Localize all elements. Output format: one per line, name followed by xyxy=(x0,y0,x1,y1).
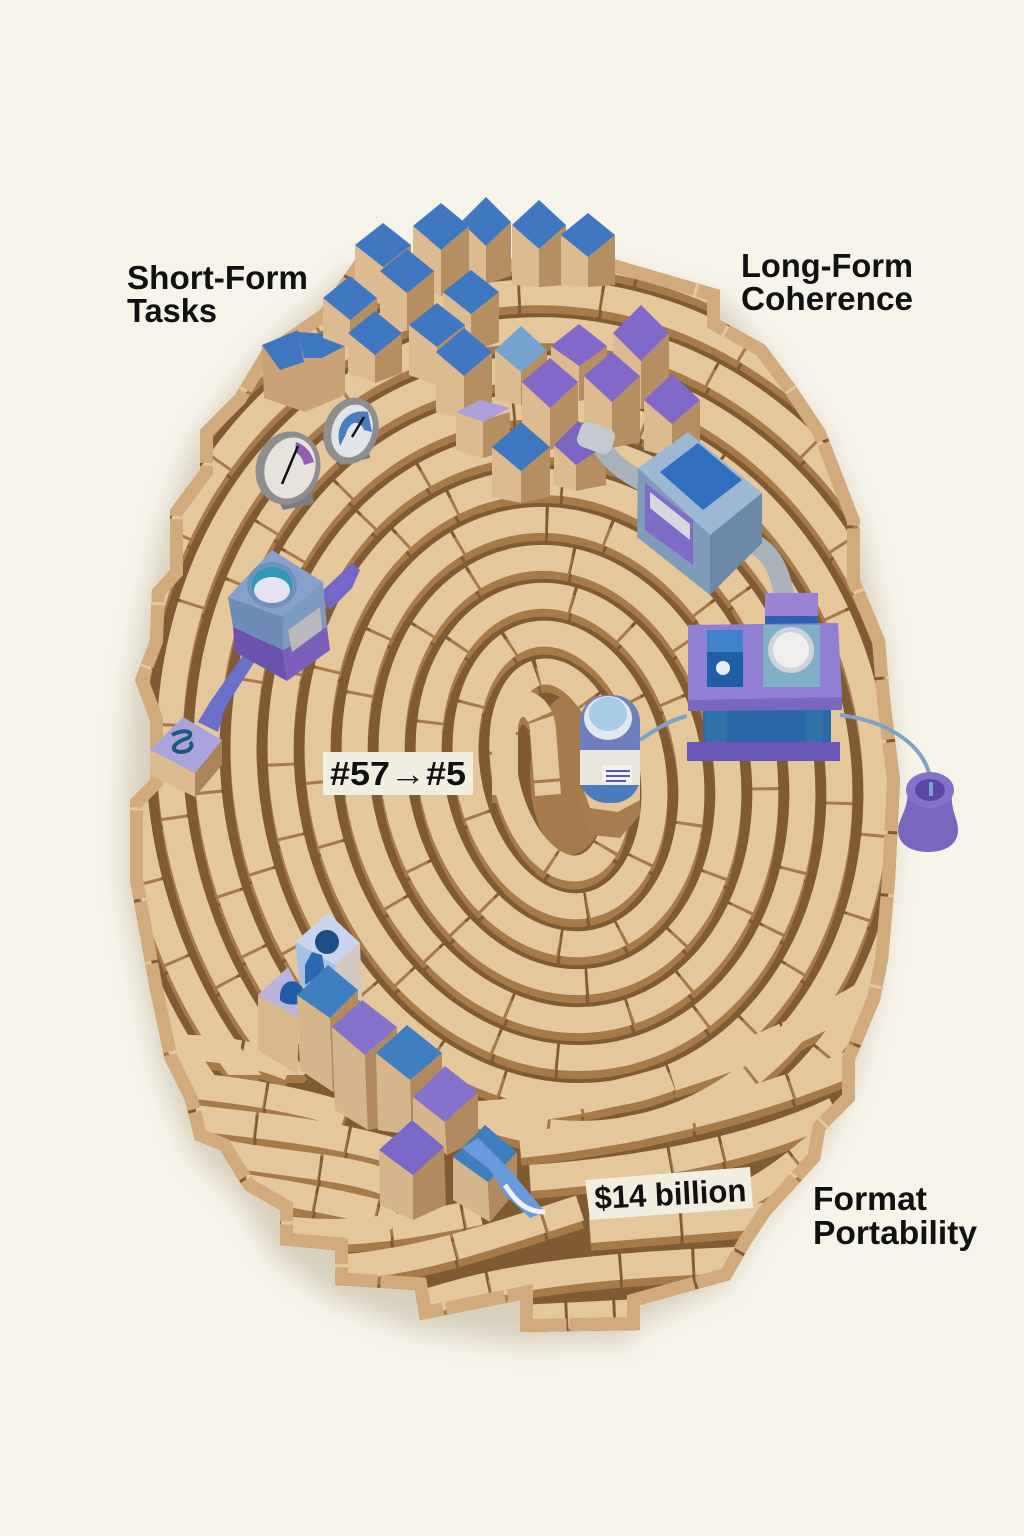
bottle body xyxy=(580,695,640,803)
block xyxy=(495,326,547,405)
line one: Format xyxy=(813,1180,927,1217)
blue plate xyxy=(660,443,742,510)
block xyxy=(561,213,615,287)
block xyxy=(409,303,465,385)
value tag xyxy=(585,1167,753,1220)
bench inner xyxy=(703,708,831,742)
blue strip xyxy=(765,616,818,625)
small lilac block xyxy=(456,400,510,458)
housing top xyxy=(228,550,323,617)
block xyxy=(522,358,578,450)
block xyxy=(461,197,511,284)
ridge top faces xyxy=(130,258,896,1329)
lilac block with dome xyxy=(258,967,305,1075)
block xyxy=(348,311,402,383)
bottle lower xyxy=(580,775,640,803)
lilac icon block xyxy=(295,913,362,1000)
fingerprint of wooden ridges xyxy=(130,258,900,1332)
box right face xyxy=(710,493,762,595)
blue bar xyxy=(297,965,358,1092)
ridge gaps base xyxy=(100,240,920,1340)
bottle platform top xyxy=(582,785,640,812)
arm upper right xyxy=(318,563,360,610)
gauge pair xyxy=(246,390,387,513)
block xyxy=(436,328,492,418)
lid xyxy=(584,696,632,740)
blue control block xyxy=(707,630,743,687)
block xyxy=(554,421,606,491)
label: long-form coherence xyxy=(741,247,913,317)
label: format portability xyxy=(813,1180,978,1251)
jagged blue block row xyxy=(262,330,345,412)
small cube with squiggle xyxy=(150,717,222,797)
top plate xyxy=(688,623,842,700)
line two: Tasks xyxy=(127,292,217,329)
counter display xyxy=(288,607,322,652)
purple pot xyxy=(898,772,958,852)
block xyxy=(613,305,669,409)
purple bar xyxy=(332,1000,397,1130)
cables xyxy=(640,715,931,782)
bench leg right xyxy=(805,708,823,750)
bench machine xyxy=(687,593,842,761)
top plate edge xyxy=(688,697,842,711)
pipe connector xyxy=(575,420,617,456)
box top xyxy=(638,432,762,535)
line two: Portability xyxy=(813,1214,978,1251)
blue block with ribbon xyxy=(453,1125,545,1222)
blue bar xyxy=(376,1025,442,1135)
block xyxy=(355,223,411,305)
bottle xyxy=(580,695,640,838)
block xyxy=(551,324,607,401)
gauge right xyxy=(315,390,387,472)
dial xyxy=(247,562,297,608)
label xyxy=(602,765,632,785)
top machine box with pipes xyxy=(575,420,785,600)
purple front block xyxy=(379,1120,446,1220)
block xyxy=(644,374,700,458)
block xyxy=(380,249,434,331)
upper pipe xyxy=(602,448,650,486)
value text: $14 billion xyxy=(593,1172,747,1216)
block xyxy=(512,200,566,287)
screen xyxy=(645,483,693,565)
gauge left xyxy=(246,423,330,513)
housing right face xyxy=(283,582,327,650)
cast shadow xyxy=(125,270,895,1344)
bar stack bottom left xyxy=(258,913,545,1222)
line two: Coherence xyxy=(741,280,913,317)
bottle platform xyxy=(580,785,640,838)
block xyxy=(492,422,550,503)
purple base right xyxy=(283,627,330,681)
lid top xyxy=(589,697,627,731)
ridge side faces xyxy=(135,260,896,1332)
rear purple tab xyxy=(765,593,818,625)
blue wooden blocks top left xyxy=(262,197,615,418)
line one: Long-Form xyxy=(741,247,913,284)
box left face xyxy=(637,468,710,595)
block xyxy=(413,203,469,296)
outer rim blocks xyxy=(130,258,900,1332)
label: short-form tasks xyxy=(127,259,308,329)
block xyxy=(584,352,640,448)
lower pipe xyxy=(735,540,785,600)
rank tag xyxy=(323,752,473,795)
purple bar xyxy=(413,1066,478,1155)
cable bottle to bench xyxy=(640,716,687,740)
bench leg left xyxy=(705,708,727,750)
cable bench to pot xyxy=(840,715,931,782)
bottle label band xyxy=(580,750,640,785)
core hollow xyxy=(530,698,596,855)
housing left face xyxy=(228,597,283,650)
left meter machine xyxy=(150,550,360,797)
line one: Short-Form xyxy=(127,259,308,296)
rim blocks xyxy=(130,258,900,1332)
base plate xyxy=(687,742,840,761)
teal block with ring xyxy=(763,625,820,687)
arm lower left xyxy=(198,645,262,732)
block xyxy=(323,276,377,348)
purple wooden blocks top centre xyxy=(456,305,700,503)
rank text: #57→#5 xyxy=(330,755,466,792)
block xyxy=(443,270,499,352)
purple base xyxy=(233,627,287,681)
